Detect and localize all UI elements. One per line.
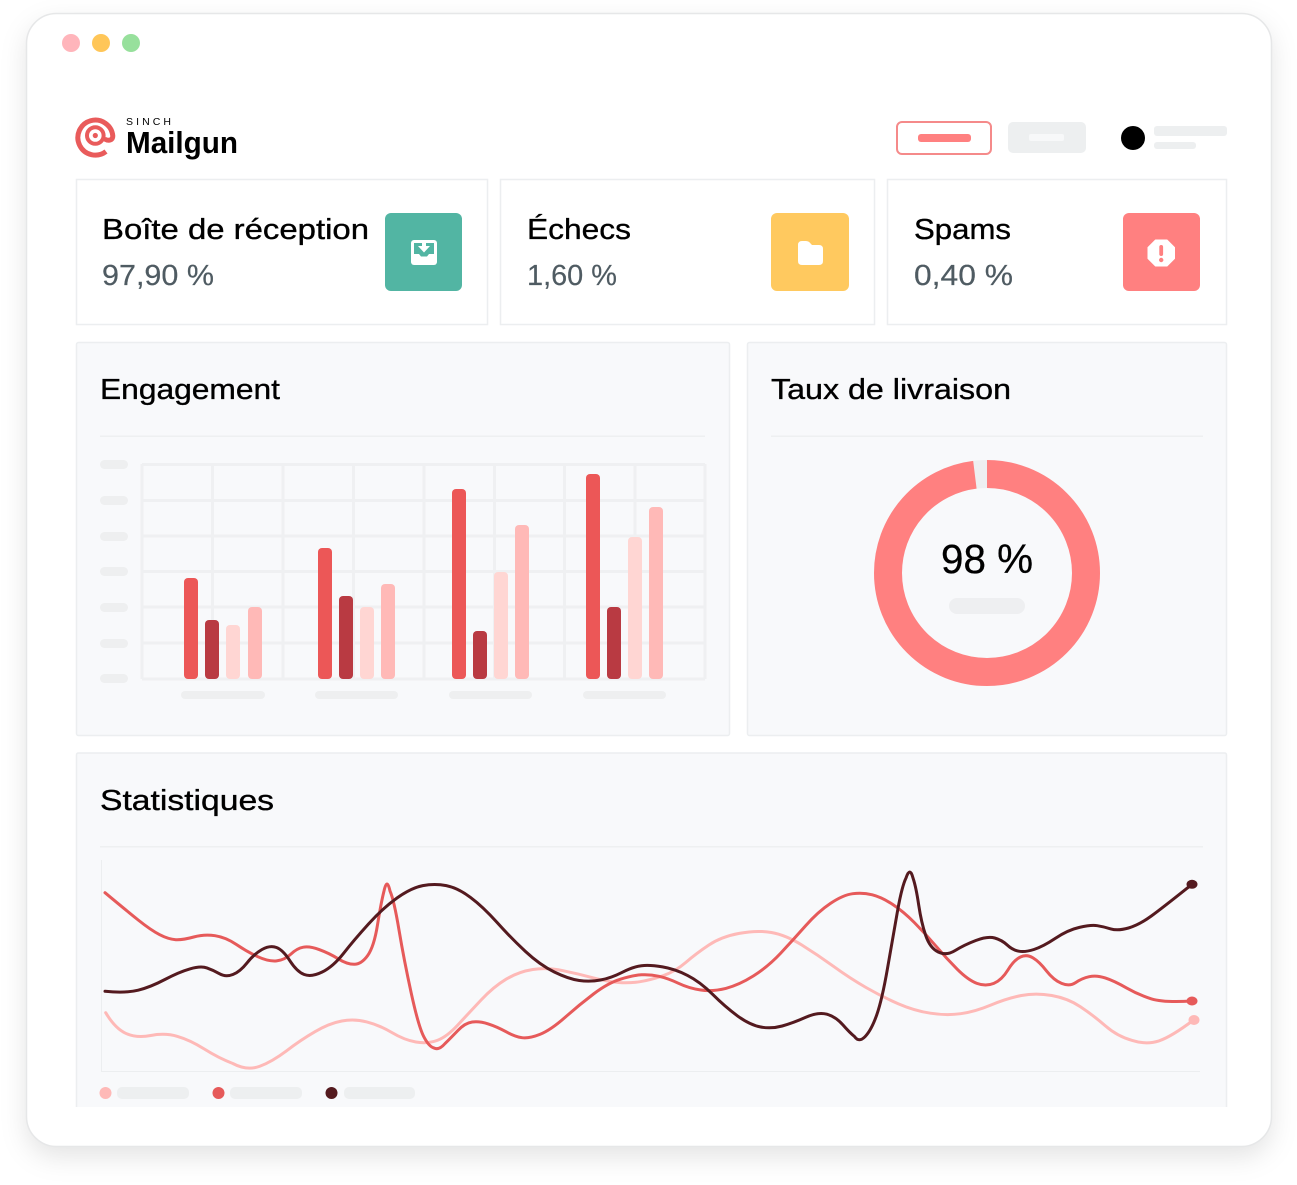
heading: Statistiques: Statistiques bbox=[100, 785, 274, 817]
card: Boîte de réception: Boîte de réception bbox=[102, 214, 369, 246]
icon: alert bbox=[1123, 213, 1200, 291]
heading: Engagement: Engagement bbox=[100, 374, 280, 406]
card: Boîte de réception bbox=[76, 180, 488, 324]
donut value: 98 % bbox=[941, 536, 1033, 582]
line chart bbox=[102, 860, 1200, 1072]
icon: inbox bbox=[385, 213, 462, 291]
legend bbox=[100, 1087, 415, 1099]
window control dots bbox=[62, 34, 140, 52]
card: Échecs: Échecs bbox=[527, 213, 631, 246]
card: Échecs: 1,60 % bbox=[527, 260, 617, 292]
x axis labels bbox=[181, 691, 666, 699]
card: Spams: Spams bbox=[914, 214, 1011, 246]
bars: group 4 bbox=[586, 474, 663, 679]
panel: Statistiques bbox=[76, 753, 1226, 1107]
y axis labels bbox=[100, 460, 128, 683]
card: Échecs bbox=[500, 180, 874, 324]
panel: Taux de livraison bbox=[748, 342, 1226, 736]
logo wordmark: SINCH bbox=[126, 116, 171, 128]
logo: Sinch Mailgun bbox=[78, 116, 238, 160]
grid bbox=[142, 464, 705, 679]
panel: Engagement bbox=[76, 342, 730, 736]
card: Boîte de réception: 97,90 % bbox=[102, 260, 214, 292]
donut chart bbox=[888, 474, 1086, 672]
bars: group 2 bbox=[318, 548, 395, 679]
bars: group 1 bbox=[184, 578, 262, 679]
bar chart bbox=[100, 460, 705, 699]
logo wordmark: Mailgun bbox=[126, 125, 238, 160]
line: pink series bbox=[106, 931, 1200, 1068]
heading: Taux de livraison: Taux de livraison bbox=[771, 374, 1011, 406]
card: Spams bbox=[888, 180, 1226, 324]
header controls bbox=[897, 122, 1227, 154]
icon: at sign bbox=[78, 120, 113, 155]
bars: group 3 bbox=[452, 489, 529, 679]
icon: folder bbox=[771, 213, 849, 291]
card: Spams: 0,40 % bbox=[914, 260, 1013, 292]
line: dark series bbox=[105, 872, 1198, 1040]
line: red series bbox=[105, 884, 1198, 1049]
